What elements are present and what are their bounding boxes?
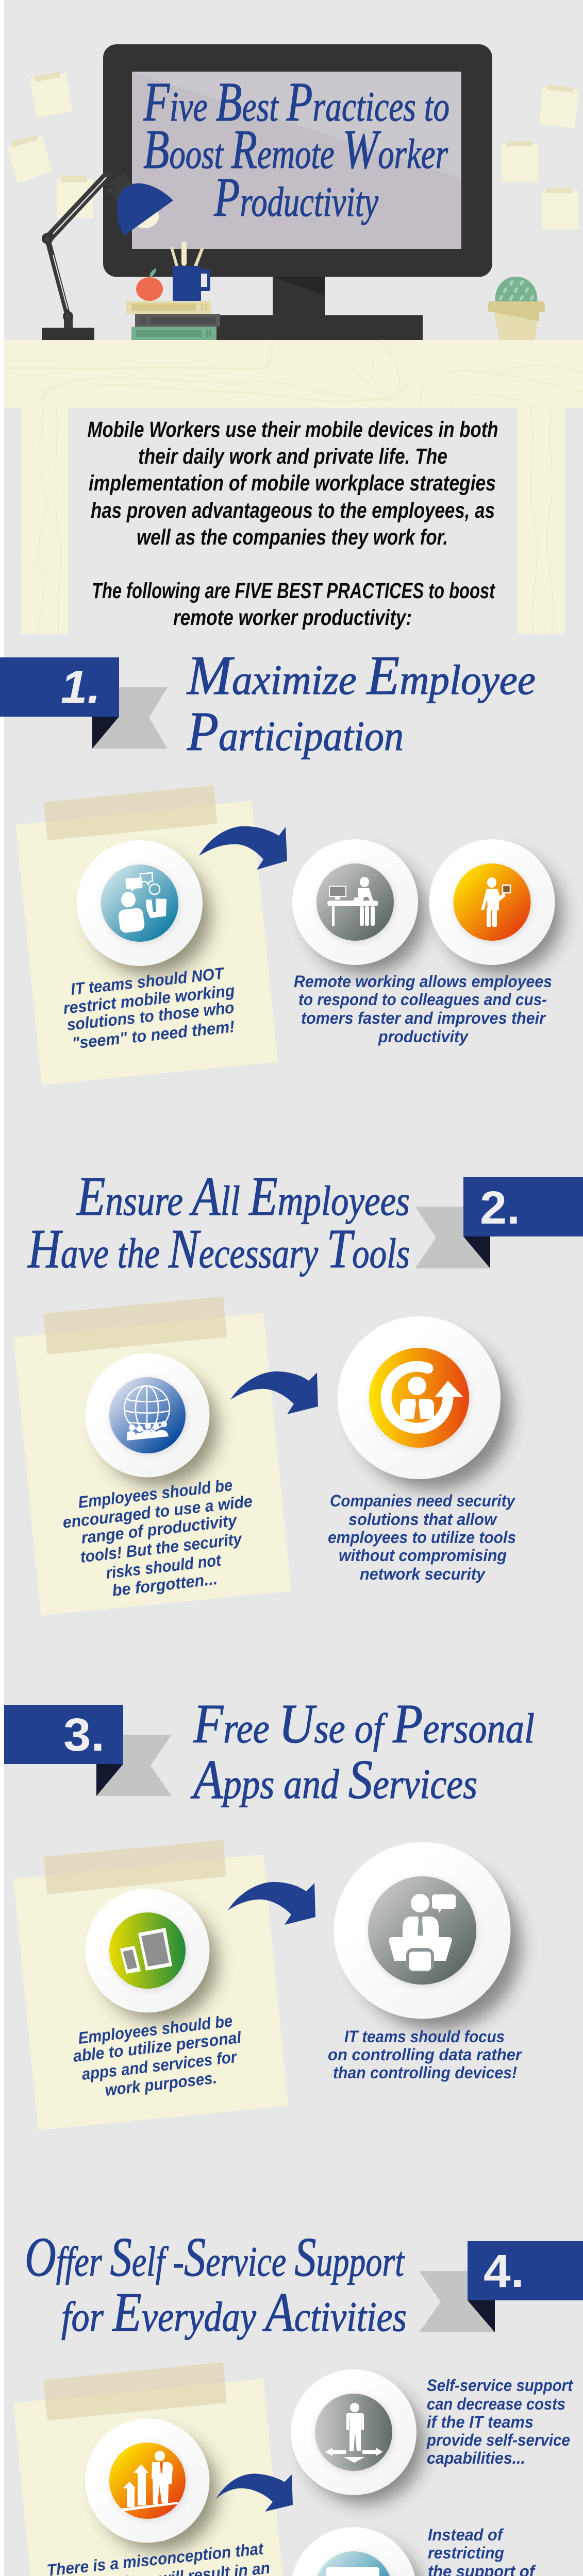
section 3 — [4, 1693, 535, 2130]
text: companies need security: employees to utilize tools — [328, 1528, 516, 1547]
text: controlling data: IT teams should focus — [344, 2027, 505, 2046]
text: personal apps: able to utilize personal — [72, 2028, 243, 2065]
text: companies need security: network security — [360, 1565, 486, 1583]
heading 2 — [27, 1166, 410, 1280]
circle: growth arrows icon — [86, 2418, 218, 2551]
circle: presenter at desk icon — [334, 1842, 521, 2030]
text: companies need security — [328, 1492, 516, 1583]
text: employees encouraged: be forgotten... — [111, 1569, 218, 1600]
heading 3: Free Use of Personal — [193, 1693, 535, 1755]
text: remote working: productivity — [378, 1027, 469, 1046]
text: personal apps: work purposes. — [104, 2069, 218, 2099]
circle: person with directional arrows icon — [291, 2369, 424, 2504]
desk lamp — [42, 170, 173, 340]
intro side panels — [21, 408, 564, 634]
text: controlling data: than controlling devices! — [333, 2063, 517, 2082]
arrow 1 — [199, 826, 287, 870]
text: employees encouraged: tools! But the security — [79, 1529, 244, 1566]
heading 2: Ensure All Employees — [76, 1166, 410, 1227]
text: self-service support: Self-service support — [427, 2376, 573, 2395]
intro text: Mobile Workers use their mobile devices in both — [88, 417, 498, 442]
circle: globe and people icon — [86, 1353, 218, 1486]
text: employees encouraged: range of productivity — [80, 1511, 239, 1547]
ribbon 2: 2. — [480, 1182, 520, 1234]
apple — [136, 268, 163, 301]
arrow 4 — [215, 2473, 293, 2512]
text: employees encouraged: risks should not — [105, 1551, 223, 1582]
title: Productivity — [213, 167, 378, 228]
heading 1 — [186, 645, 536, 762]
ribbon 4 — [419, 2241, 583, 2332]
heading 4: for Everyday Activities — [61, 2282, 407, 2343]
text: self-service support: capabilities... — [427, 2449, 525, 2467]
text: employees encouraged: encouraged to use a wide — [62, 1492, 253, 1532]
text: remote working: tomers faster and improves their — [301, 1009, 546, 1027]
text: IT teams should NOT: solutions to those who — [66, 998, 235, 1034]
text: self-service support: provide self-service — [426, 2431, 570, 2449]
section 4 — [13, 2227, 583, 2576]
note 3 — [13, 1840, 288, 2130]
desk surface — [4, 340, 583, 408]
text: controlling data — [328, 2027, 523, 2082]
heading 1: Participation — [187, 701, 404, 762]
intro text: their daily work and private life. The — [138, 444, 447, 469]
ribbon 1 — [0, 657, 168, 749]
circle: person with tablet icon — [429, 839, 562, 974]
text: IT teams should NOT: restrict mobile working — [62, 981, 236, 1018]
section 2 — [13, 1166, 583, 1616]
circle: presentation audience icon — [291, 2527, 424, 2576]
ribbon 3 — [4, 1705, 172, 1796]
cactus plant — [488, 277, 545, 340]
circle: desk worker icon — [292, 839, 426, 974]
text: instead of restricting — [427, 2526, 565, 2576]
heading 1: Maximize Employee — [186, 645, 536, 706]
text: employees encouraged: Employees should be — [77, 1476, 234, 1512]
text: personal apps: apps and services for — [81, 2047, 238, 2083]
circle: IT team chat icon — [77, 840, 211, 975]
ribbon 4: 4. — [484, 2246, 524, 2297]
text: IT teams should NOT — [62, 964, 236, 1053]
text: personal apps — [72, 2011, 243, 2099]
ribbon 2 — [415, 1177, 583, 1268]
heading 3 — [191, 1693, 535, 1810]
intro text: well as the companies they work for. — [137, 525, 448, 550]
text: companies need security: Companies need security — [330, 1492, 516, 1510]
desktop monitor with title — [103, 44, 492, 340]
intro text: implementation of mobile workplace strategies — [89, 471, 496, 496]
text: IT teams should NOT: IT teams should NOT — [70, 964, 226, 998]
title: Boost Remote Worker — [143, 119, 448, 180]
ribbon 3: 3. — [63, 1709, 105, 1761]
text: employees encouraged — [62, 1476, 253, 1600]
text: instead of restricting: Instead of — [428, 2526, 504, 2544]
text: self-service support: if the IT teams — [427, 2413, 534, 2431]
note 2 — [13, 1296, 291, 1616]
title — [143, 72, 449, 228]
heading 4 — [25, 2227, 407, 2343]
intro text — [88, 417, 498, 630]
section 1 — [0, 645, 562, 1085]
heading 2: Have the Necessary Tools — [27, 1218, 410, 1280]
circle: growth swirl icon — [338, 1316, 510, 1490]
text: remote working: to respond to colleagues and cus- — [298, 990, 547, 1009]
heading 4: Offer Self -Service Support — [25, 2227, 405, 2288]
text: remote working: Remote working allows employees — [294, 972, 552, 991]
intro text: has proven advantageous to the employees, as — [91, 498, 495, 523]
text: instead of restricting: restricting — [428, 2544, 504, 2562]
text: IT teams should NOT: "seem" to need them! — [71, 1017, 236, 1053]
intro text: remote worker productivity: — [173, 605, 412, 630]
text: companies need security: solutions that allow — [348, 1510, 497, 1529]
note 1 — [15, 785, 278, 1085]
stack of books — [126, 301, 220, 340]
text: self-service support — [426, 2376, 573, 2467]
ribbon 1: 1. — [61, 662, 101, 713]
text: remote working — [294, 972, 552, 1046]
text: self-service support: can decrease costs — [427, 2395, 565, 2413]
sticky notes on the wall — [7, 72, 579, 229]
text: companies need security: without compromising — [339, 1546, 507, 1565]
text: personal apps: Employees should be — [77, 2011, 234, 2047]
pen mug — [170, 241, 210, 301]
title: Five Best Practices to — [143, 72, 449, 133]
note 4 — [13, 2362, 291, 2576]
arrow 3 — [228, 1882, 315, 1925]
circle: tablet and phone icon — [86, 1889, 218, 2021]
heading 3: Apps and Services — [191, 1749, 477, 1810]
arrow 2 — [230, 1371, 318, 1414]
text: controlling data: on controlling data rather — [328, 2045, 523, 2064]
